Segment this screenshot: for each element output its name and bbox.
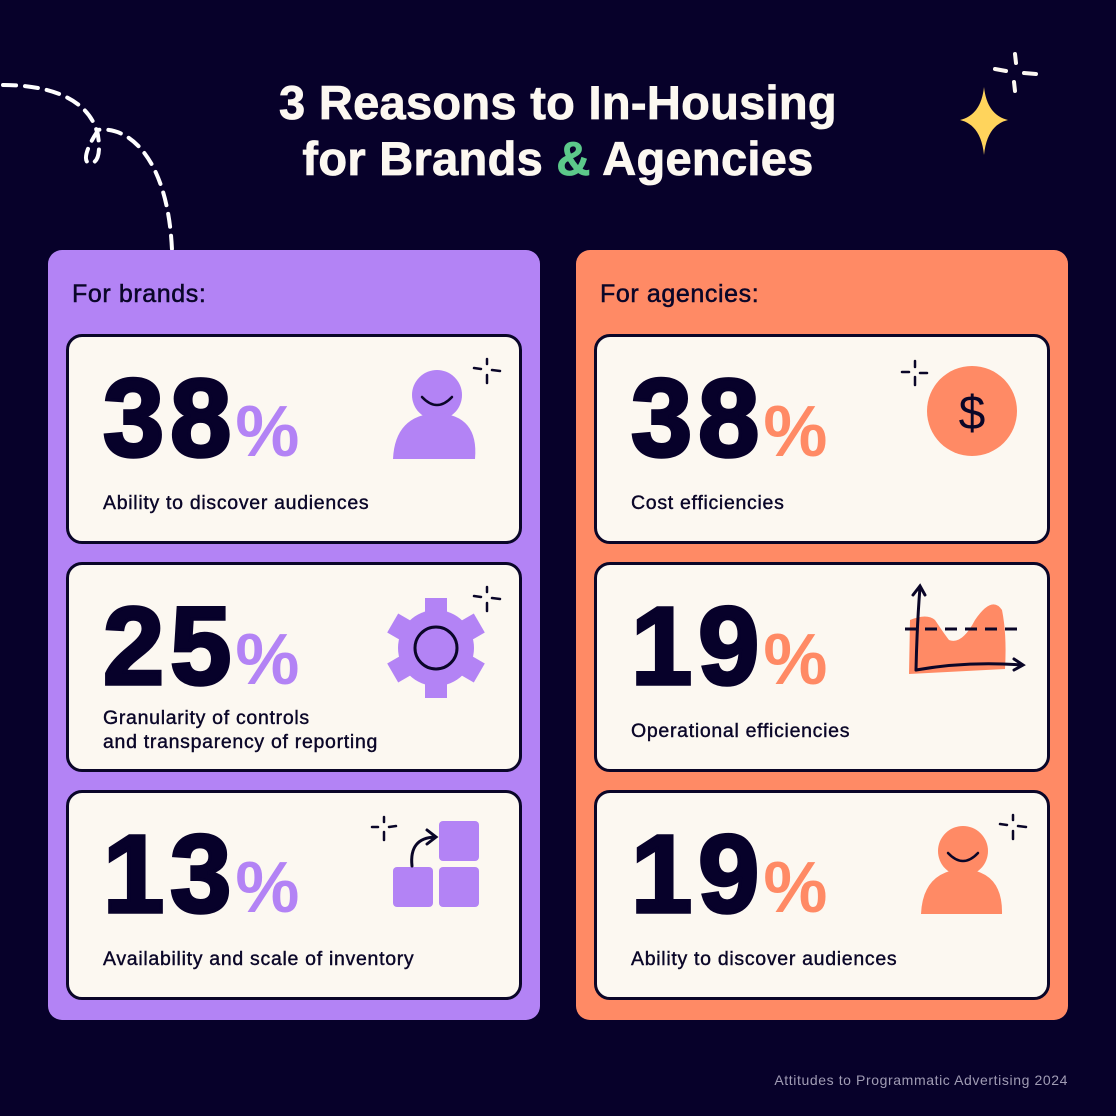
title: for Brands & Agencies [302, 132, 814, 185]
icon: blocks [370, 816, 479, 907]
card: 13% inventory: 13% [103, 813, 299, 936]
card: 19% operational: 19% [631, 585, 827, 708]
card: 38% audiences: Ability to discover audiences [103, 492, 369, 514]
card: 38% cost: Cost efficiencies [631, 492, 785, 514]
card: 38% cost: 38% [631, 357, 827, 480]
panel: for brands [48, 250, 540, 1020]
card: 13% inventory [66, 790, 522, 1000]
card: 25% granularity: Granularity of controls [103, 707, 310, 729]
panel: for agencies [576, 250, 1068, 1020]
card: 13% inventory: Availability and scale of inventory [103, 948, 414, 970]
card: 25% granularity: and transparency of reporting [103, 731, 378, 753]
title [279, 76, 837, 186]
card: 19% audiences: 19% [631, 813, 827, 936]
card: 38% audiences: 38% [103, 357, 299, 480]
icon: dollar coin: $ [959, 387, 985, 440]
decorative dashed path [1, 83, 174, 250]
card: 38% audiences [66, 334, 522, 544]
card: 25% granularity [66, 562, 522, 772]
heading: for agencies: For agencies: [600, 280, 759, 308]
heading: for brands: For brands: [72, 280, 206, 308]
card: 38% cost [594, 334, 1050, 544]
card: 19% operational: Operational efficiencies [631, 720, 850, 742]
card: 19% audiences [594, 790, 1050, 1000]
icon: sparkles [960, 52, 1038, 155]
card: 19% audiences: Ability to discover audiences [631, 948, 897, 970]
source footnote: Attitudes to Programmatic Advertising 2024 [774, 1072, 1068, 1088]
card: 25% granularity: 25% [103, 585, 299, 708]
icon: gear [387, 586, 502, 698]
icon: person [921, 814, 1028, 914]
icon: chart [905, 583, 1026, 674]
card: 19% operational [594, 562, 1050, 772]
title: 3 Reasons to In-Housing [279, 76, 837, 129]
icon: person [393, 358, 502, 459]
icon: dollar coin [900, 360, 1017, 456]
